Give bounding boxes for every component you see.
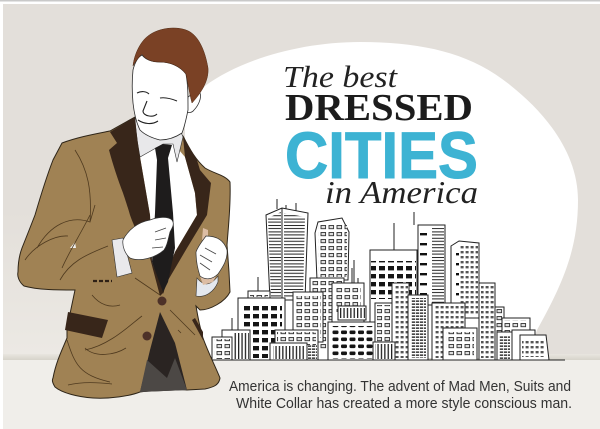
ear [186, 92, 201, 113]
building striped centre [408, 295, 428, 360]
striped front building [270, 343, 307, 360]
building M [443, 328, 477, 360]
striped base [373, 342, 395, 360]
building H [370, 250, 417, 325]
building K [479, 283, 495, 360]
jacket pocket [65, 312, 108, 338]
man in suit [18, 28, 230, 398]
antennas [232, 199, 414, 330]
facial features [137, 92, 177, 124]
caption line 1: America is changing. The advent of Mad Men, Suits and [229, 379, 571, 395]
building E [310, 278, 344, 360]
title [283, 59, 478, 210]
title line: in America: in America [325, 174, 478, 210]
tower A [266, 208, 308, 300]
collar [135, 118, 183, 162]
tower J [451, 241, 479, 318]
gap between arm and body [70, 242, 76, 248]
left lapel [109, 117, 164, 296]
finger lines [152, 228, 216, 270]
tall narrow building [375, 303, 392, 360]
building O [497, 332, 512, 360]
sleeve buttons [93, 280, 112, 282]
title line: CITIES: CITIES [285, 118, 478, 192]
floor band [3, 354, 600, 429]
top border line [0, 0, 600, 2]
building F [332, 283, 364, 328]
building P [512, 330, 535, 360]
white spotlight ellipse [185, 42, 578, 358]
caption text [229, 379, 572, 412]
left hand [196, 236, 227, 279]
tie [152, 144, 175, 292]
caption line 2: White Collar has created a more style conscious man. [236, 396, 572, 412]
ground line [212, 359, 565, 361]
mid lower building [275, 330, 318, 360]
jacket [18, 117, 230, 398]
jacket buttons [142, 296, 166, 340]
jacket crease lines [25, 150, 195, 385]
right hand [123, 217, 173, 260]
left cuff [196, 276, 218, 296]
right cuff [112, 238, 132, 277]
hair [133, 28, 208, 103]
building Q [520, 335, 549, 360]
vest [140, 312, 187, 392]
shirt [140, 143, 197, 290]
building D [293, 292, 323, 342]
building C [238, 298, 285, 360]
wrist and thumb skin [200, 228, 217, 285]
building R [502, 318, 530, 340]
city skyline illustration [212, 199, 565, 360]
lighter lower left wall [3, 210, 203, 355]
title line: DRESSED: DRESSED [285, 87, 473, 129]
tower I [418, 225, 445, 305]
face [132, 55, 188, 140]
building G [328, 322, 375, 360]
right pocket flap [192, 318, 203, 340]
vest lower shade [140, 358, 187, 392]
building L [432, 303, 465, 360]
right lapel [162, 137, 211, 294]
title line: The best: The best [283, 59, 399, 94]
tower B [315, 218, 349, 280]
small left buildings [222, 330, 250, 360]
building N [495, 307, 504, 360]
